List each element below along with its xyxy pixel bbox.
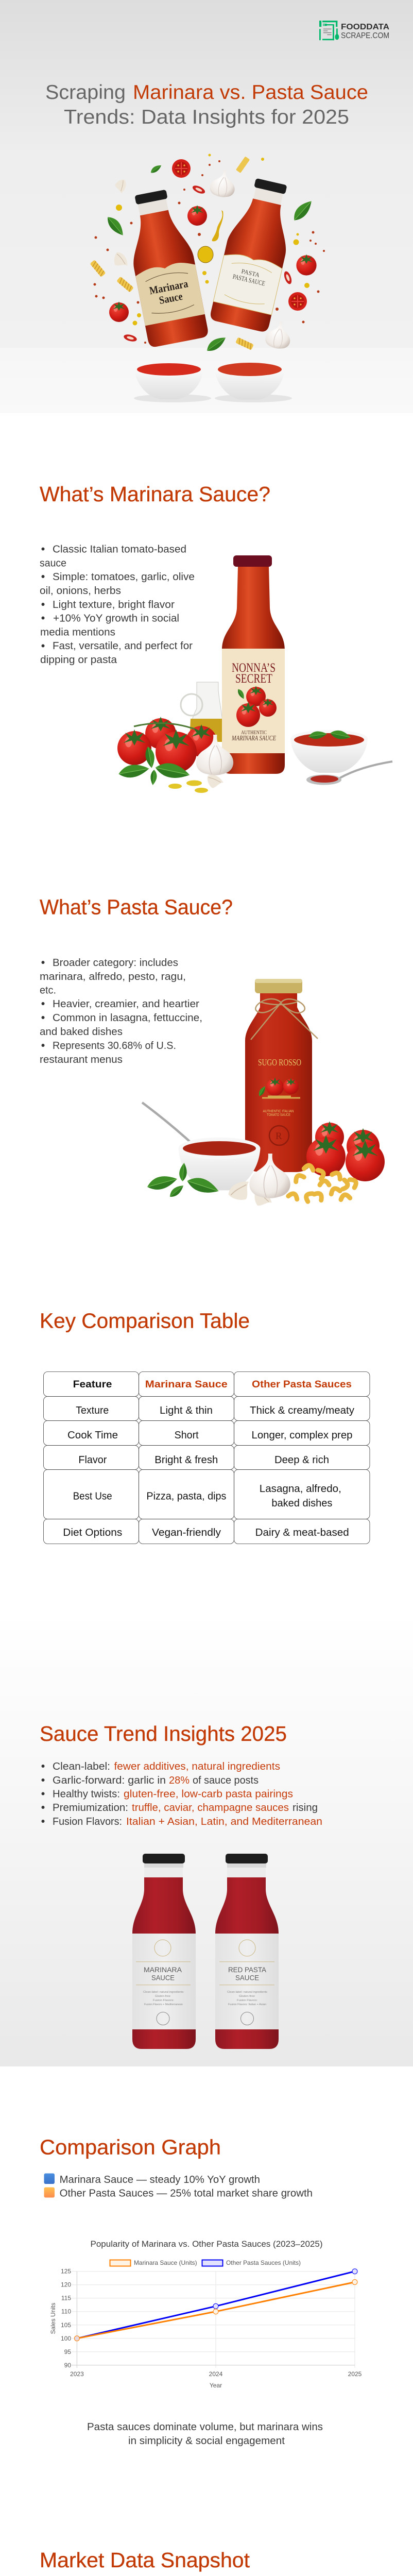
title: Trends: Data Insights for 2025 [64, 106, 349, 128]
y-axis labels: 100 [61, 2335, 71, 2342]
logo: top right [319, 21, 389, 40]
table header: Feature [73, 1379, 112, 1390]
title: Scraping [45, 81, 126, 104]
chart takeaway: Pasta sauces dominate volume, but marinara wins [87, 2421, 323, 2433]
table rows: Dairy & meat-based [255, 1527, 349, 1538]
series: other pasta sauces [77, 2269, 357, 2338]
y-axis labels: 90 [64, 2362, 71, 2369]
illustration: bowl and spoon [290, 729, 392, 785]
y-axis labels: 115 [61, 2295, 71, 2302]
bullet list: +10% YoY growth in social [53, 613, 179, 624]
chart legend: Marinara Sauce (Units) [134, 2259, 197, 2266]
bullet list: truffle, caviar, champagne sauces [132, 1802, 289, 1814]
bullet list: sauce [40, 557, 66, 569]
illustration: red pasta bottle [215, 1854, 279, 2049]
illustration: marinara sauce bottle: Marinara [148, 277, 189, 297]
bullet list: Garlic-forward: garlic in [53, 1775, 166, 1786]
heading: Sauce Trend Insights 2025 [40, 1722, 287, 1745]
illustration: marinara bottle [222, 555, 285, 774]
bullet list [41, 1761, 322, 1827]
table rows: Light & thin [160, 1405, 213, 1416]
title [45, 81, 368, 128]
table rows: Flavor [78, 1454, 107, 1466]
bullet list: Fusion Flavors: [53, 1816, 122, 1827]
table rows: Cook Time [67, 1430, 118, 1441]
illustration: marinara bottle: SAUCE [151, 1973, 175, 1981]
y-axis labels: 120 [61, 2281, 71, 2289]
illustration: sugo rosso bottle [245, 979, 318, 1172]
panel: hero [0, 0, 413, 413]
table rows: Bright & fresh [154, 1454, 218, 1466]
table header [73, 1379, 352, 1390]
chart takeaway [87, 2421, 323, 2447]
bullet list: Fast, versatile, and perfect for [53, 640, 193, 652]
bullet list: etc. [40, 985, 56, 996]
bullet list: of sauce posts [193, 1775, 259, 1786]
illustration: marinara bottle: MARINARA [144, 1965, 182, 1974]
heading: Market Data Snapshot [40, 2548, 250, 2572]
table header: Other Pasta Sauces [252, 1379, 352, 1390]
bullet list [40, 544, 195, 666]
illustration: red pasta bottle: Gluten-free [239, 1995, 255, 1998]
chart takeaway: in simplicity & social engagement [128, 2435, 285, 2447]
illustration: pasta sauce bottle: PASTA SAUCE [232, 273, 266, 287]
bullet list: Healthy twists: [53, 1789, 120, 1800]
illustration: floating ingredients [90, 154, 325, 354]
table rows: Best Use [73, 1491, 112, 1502]
illustration: red pasta bottle: Clean-label: natural ingredients [227, 1991, 268, 1994]
illustration: marinara bottle: AUTHENTIC [241, 730, 267, 736]
line chart [49, 2239, 362, 2389]
illustration: sugo rosso bottle: SUGO ROSSO [258, 1057, 301, 1067]
table rows: Thick & creamy/meaty [250, 1405, 354, 1416]
y-axis labels: 105 [61, 2321, 71, 2329]
table header: Marinara Sauce [145, 1379, 228, 1390]
title: Marinara vs. Pasta Sauce [133, 81, 368, 104]
table rows: Longer, complex prep [251, 1430, 352, 1441]
y-axis labels [61, 2268, 71, 2369]
table rows: baked dishes [271, 1498, 332, 1509]
x-axis labels [70, 2370, 362, 2389]
heading: Comparison Graph [40, 2135, 221, 2159]
bullet list: Premiumization: [53, 1802, 128, 1814]
illustration: marinara bottle: Fusion Flavors: [153, 1999, 174, 2002]
key: marinara: Marinara Sauce — steady 10% YoY growth [60, 2174, 260, 2185]
bullet list: media mentions [40, 626, 115, 638]
x-axis labels: 2024 [209, 2370, 223, 2378]
panel: sauce trend insights [0, 1613, 413, 2066]
illustration: marinara bottle [132, 1854, 196, 2049]
table rows: Lasagna, alfredo, [260, 1483, 341, 1495]
illustration: red pasta bottle: SAUCE [235, 1973, 259, 1981]
bullet list: Heavier, creamier, and heartier [53, 998, 199, 1010]
illustration: sugo rosso bottle: AUTHENTIC ITALIAN [263, 1110, 294, 1113]
x-axis labels: Year [210, 2382, 222, 2389]
bullet list: Italian + Asian, Latin, and Mediterranean [126, 1816, 322, 1827]
table rows: Vegan-friendly [152, 1527, 221, 1538]
illustration: red pasta bottle: Fusion Flavors: Italian + Asian [228, 2003, 266, 2006]
bullet list: Light texture, bright flavor [53, 599, 175, 611]
chart legend: Other Pasta Sauces (Units) [226, 2259, 301, 2266]
table rows: Pizza, pasta, dips [146, 1491, 226, 1502]
chart legend [110, 2259, 301, 2266]
x-axis labels: 2023 [70, 2370, 84, 2378]
table rows: Diet Options [63, 1527, 122, 1538]
key: other pasta sauces: Other Pasta Sauces — 25% total market share growth [60, 2188, 313, 2199]
illustration: marinara sauce bottle [121, 187, 209, 348]
illustration: oil jug [181, 682, 222, 742]
illustration: marinara bottle: Fusion Flavors + Mediterranean [144, 2003, 183, 2006]
panel: what's marinara sauce [40, 482, 392, 793]
x-axis labels: 2025 [348, 2370, 362, 2378]
heading: What’s Pasta Sauce? [40, 895, 233, 919]
bullet list: and baked dishes [40, 1026, 123, 1038]
illustration: basil, garlic, tomatoes and macaroni [146, 1121, 385, 1206]
bullet list: rising [292, 1802, 318, 1814]
y-axis labels: 95 [64, 2348, 71, 2355]
chart title: Popularity of Marinara vs. Other Pasta Sauces (2023–2025) [91, 2239, 322, 2249]
panel: what's pasta sauce [40, 895, 385, 1206]
bullet list: oil, onions, herbs [40, 585, 121, 597]
bullet list: Broader category: includes [53, 957, 178, 969]
heading: What’s Marinara Sauce? [40, 482, 270, 506]
table grid [43, 1371, 370, 1544]
illustration: pasta sauce bottle [209, 175, 301, 333]
logo: top right: SCRAPE.COM [341, 31, 389, 40]
illustration: marinara bottle: MARINARA SAUCE [231, 735, 276, 742]
table rows: Deep & rich [274, 1454, 329, 1466]
bullet list: Classic Italian tomato-based [53, 544, 186, 555]
heading: Key Comparison Table [40, 1309, 250, 1332]
bullet list: 28% [169, 1775, 190, 1786]
bullet list: dipping or pasta [40, 654, 117, 666]
bullet list: Common in lasagna, fettuccine, [53, 1012, 202, 1024]
illustration: marinara sauce bottle: Sauce [158, 290, 184, 307]
bullet list: restaurant menus [40, 1054, 123, 1065]
logo: top right: FOODDATA [341, 23, 389, 31]
bullet list [40, 957, 202, 1065]
illustration: marinara bottle: NONNA’S [232, 661, 276, 675]
table rows: Short [175, 1430, 199, 1441]
bullet list: gluten-free, low-carb pasta pairings [124, 1789, 293, 1800]
panel: comparison graph [0, 2066, 413, 2468]
illustration: sugo rosso bottle: R [276, 1131, 282, 1142]
y-axis labels: 125 [61, 2268, 71, 2275]
illustration: sugo rosso bottle: TOMATO SAUCE [267, 1113, 290, 1117]
illustration: pasta sauce bottle: PASTA [240, 267, 261, 279]
illustration: marinara bottle: SECRET [235, 672, 272, 686]
table rows: Texture [76, 1405, 109, 1416]
bullet list: Represents 30.68% of U.S. [53, 1040, 176, 1052]
panel: key comparison table [40, 1309, 370, 1544]
bullet list: Clean-label: [53, 1761, 110, 1772]
illustration: marinara bottle: Gluten-free [155, 1995, 170, 1998]
illustration: red pasta bottle: RED PASTA [228, 1965, 267, 1974]
bullet list: fewer additives, natural ingredients [114, 1761, 280, 1772]
bullet list: marinara, alfredo, pesto, ragu, [40, 971, 186, 982]
y-axis labels: 110 [61, 2308, 71, 2315]
y-axis title: Sales Units [49, 2303, 57, 2334]
series: marinara sauce [74, 2279, 357, 2341]
illustration: marinara bottle: Clean-label: natural ingredients [143, 1991, 184, 1994]
illustration: tomatoes, garlic and basil [117, 717, 233, 793]
illustration: bowl and spoon [142, 1103, 261, 1190]
bullet list: Simple: tomatoes, garlic, olive [53, 571, 195, 583]
illustration: sauce bowls [134, 361, 292, 402]
illustration: red pasta bottle: Fusion Flavors: [237, 1999, 257, 2002]
table rows [63, 1405, 354, 1538]
